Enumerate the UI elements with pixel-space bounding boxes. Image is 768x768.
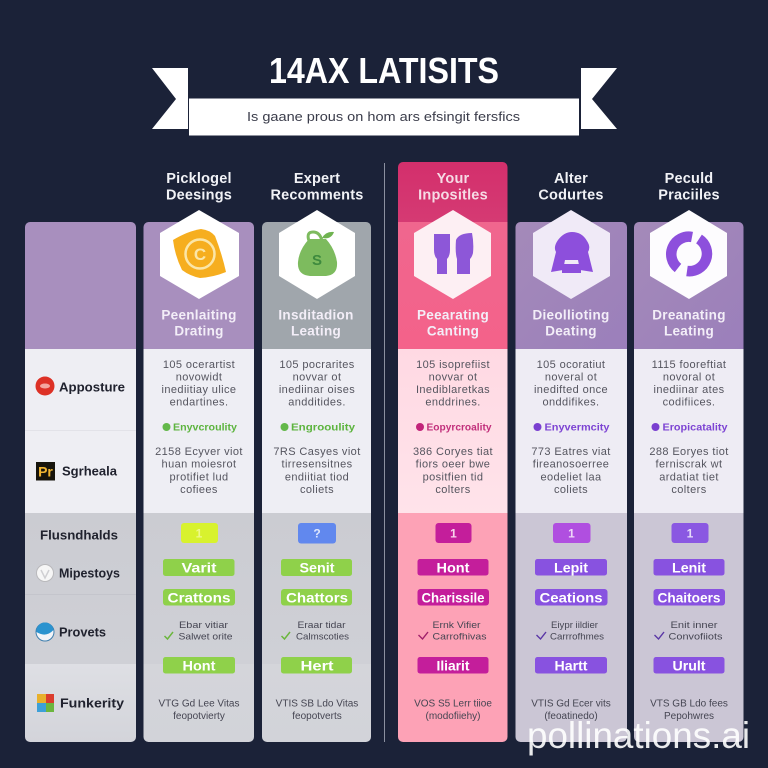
icon: purple hands (434, 233, 473, 274)
badge number: 1 (450, 526, 457, 540)
column subheading: Deating (545, 324, 597, 338)
icon: money bag (298, 232, 337, 276)
pill: Senit (281, 559, 352, 576)
column subheading: Dieollioting (532, 308, 610, 322)
column heading: Deesings (166, 188, 232, 204)
description text: 105 pocrarites (279, 359, 355, 371)
footer text: feopotverts (292, 711, 342, 722)
column heading: Alter (554, 171, 588, 187)
status label: Enyvcroulity (173, 422, 237, 434)
description text: novvar ot (293, 372, 341, 384)
checklist (418, 620, 487, 642)
detail text: coliets (300, 484, 334, 496)
pill: Senit: Senit (300, 560, 335, 576)
badge number (672, 523, 708, 543)
column subheading: Insditadion (278, 308, 354, 322)
column subheading: Leating (291, 324, 341, 338)
pill: Crattons: Crattons (168, 590, 231, 606)
badge number (436, 523, 472, 543)
ribbon left tail (152, 68, 188, 129)
description text: novoral ot (663, 372, 715, 384)
detail text: tirresensitnes (281, 459, 353, 471)
pill: Hert (281, 657, 352, 674)
icon: Pr square: Pr (38, 464, 53, 480)
column heading: Expert (294, 171, 340, 187)
pill: Hont (418, 559, 488, 576)
column heading: Peculd (665, 171, 713, 187)
detail text: coliets (554, 484, 588, 496)
footer text: VTS GB Ldo fees (650, 698, 728, 710)
footer text: VOS S5 Lerr tiioe (414, 698, 492, 710)
footer text: (feoatinedo) (544, 711, 598, 722)
status label: Engrooulity (291, 422, 355, 434)
status label: Enyvermcity (544, 422, 610, 434)
detail text: ferniscrak wt (656, 459, 722, 471)
description text: inediitiay ulice (162, 384, 236, 396)
pill: Varit: Varit (182, 560, 217, 576)
status label: Eropicatality (662, 422, 728, 434)
icon: money bag: S (312, 252, 322, 269)
detail text: huan moiesrot (162, 459, 236, 471)
pill: Chaitoers: Chaitoers (658, 590, 721, 606)
detail text: eodeliet laa (540, 471, 602, 483)
icon: colorful square (37, 694, 54, 712)
pill: Hont (163, 657, 235, 674)
title: 14AX LATISITS (269, 50, 499, 91)
checklist: Convofiiots (668, 632, 723, 642)
pill: Lenit: Lenit (672, 560, 706, 576)
label: Sgrheala: Sgrheala (62, 464, 118, 478)
label: Flusndhalds: Flusndhalds (40, 528, 118, 542)
icon: purple ring (671, 237, 707, 271)
checklist (164, 620, 232, 642)
footer text: Pepohwres (664, 711, 714, 722)
checklist (654, 620, 723, 642)
hexagon badge (533, 210, 610, 299)
column subheading: Dreanating (652, 308, 726, 322)
detail text: ardatiat tiet (659, 471, 719, 483)
footer text: VTIS Gd Ecer vits (531, 698, 611, 710)
description text: inediinar ates (653, 384, 725, 396)
panel: column 3 highlighted (398, 162, 508, 742)
checklist: Calmscoties (296, 632, 349, 642)
badge number (298, 523, 336, 544)
description text: noveral ot (545, 372, 597, 384)
checklist (536, 620, 604, 642)
detail text: colters (671, 484, 707, 496)
ribbon banner (152, 68, 617, 136)
pill: Lepit (535, 559, 607, 576)
icon: red circle (36, 376, 54, 396)
detail text: colters (435, 484, 471, 496)
column subheading: Drating (174, 324, 224, 338)
checklist: Carrofhivas (432, 632, 487, 642)
badge number: 1 (568, 526, 575, 540)
badge number: 1 (196, 526, 203, 540)
status label: Eopyrcroality (426, 422, 492, 434)
detail text: cofiees (180, 484, 218, 496)
column heading: Inpositles (418, 188, 488, 204)
detail text: 386 Coryes tiat (413, 446, 493, 458)
icon: blue circle (36, 622, 54, 641)
column heading: Codurtes (538, 188, 604, 204)
description text: andditides. (288, 396, 346, 408)
label: Mipestoys: Mipestoys (59, 566, 120, 580)
subtitle: Is gaane prous on hom ars efsingit fersfics (247, 109, 521, 124)
label: Funkerity: Funkerity (60, 696, 124, 710)
pill: Hartt (535, 657, 607, 674)
detail text: protifiet lud (169, 471, 229, 483)
description text: novvar ot (429, 372, 477, 384)
center divider (384, 163, 385, 742)
description text: inediinar oises (279, 384, 355, 396)
checklist: Enit inner (670, 620, 718, 631)
pill: Varit (163, 559, 234, 576)
description text: inedifted once (534, 384, 608, 396)
hexagon badge (279, 210, 355, 299)
column subheading: Peearating (417, 308, 489, 322)
checklist: Ebar vitiar (179, 620, 228, 631)
panel: column 2 (262, 171, 371, 742)
description text: 105 isoprefiist (416, 359, 490, 371)
checklist: Carrrofhmes (550, 632, 604, 642)
description text: 105 ocerartist (163, 359, 235, 371)
panel: column 4 (516, 171, 628, 742)
ribbon right tail (581, 68, 617, 129)
detail text: 288 Eoryes tiot (649, 446, 729, 458)
pill: Iliarit (418, 657, 488, 674)
detail text: 2158 Ecyver viot (155, 446, 243, 458)
description text: 105 ocoratiut (537, 359, 605, 371)
panel: column 5 (634, 171, 744, 742)
description text: 1115 fooreftiat (652, 359, 726, 371)
pill: Hont: Hont (182, 658, 216, 674)
label: Provets: Provets (59, 626, 106, 640)
column subheading: Canting (427, 324, 479, 338)
column heading: Your (437, 171, 469, 187)
icon: purple figure (551, 232, 593, 273)
checklist (282, 620, 349, 642)
column subheading: Peenlaiting (161, 308, 237, 322)
column heading: Praciiles (658, 188, 720, 204)
pill: Chattors: Chattors (286, 590, 348, 606)
badge number (553, 523, 590, 543)
pill: Ceations: Ceations (540, 590, 603, 606)
label: Apposture: Apposture (59, 380, 125, 394)
column heading: Picklogel (166, 171, 232, 187)
footer text: VTIS SB Ldo Vitas (276, 698, 358, 710)
icon: white circle (36, 564, 54, 582)
pill: Charissile: Charissile (422, 590, 485, 606)
hexagon badge (414, 210, 491, 299)
panel: column 1 (144, 171, 254, 742)
description text: Inediblaretkas (416, 384, 490, 396)
checklist: Eraar tidar (298, 620, 346, 631)
footer text: feopotvierty (173, 711, 225, 722)
watermark: pollinations.ai (527, 715, 750, 756)
badge number (181, 523, 218, 543)
detail text: endiitiat tiod (285, 471, 349, 483)
detail text: positfien tid (423, 471, 483, 483)
pill: Lepit: Lepit (554, 560, 588, 576)
pill: Iliarit: Iliarit (436, 658, 470, 674)
footer text: VTG Gd Lee Vitas (159, 698, 239, 710)
hexagon badge (650, 210, 727, 299)
description text: codifiices. (663, 396, 715, 408)
detail text: fiors oeer bwe (416, 459, 490, 471)
footer text: (modofiiehy) (425, 711, 481, 722)
description text: novowidt (176, 372, 222, 384)
detail text: fireanosoerree (533, 459, 609, 471)
hexagon badge (160, 210, 239, 299)
description text: onddifikes. (542, 396, 600, 408)
pill: Hont: Hont (436, 560, 470, 576)
column subheading: Leating (664, 324, 714, 338)
pill: Lenit (654, 559, 724, 576)
pill: Hartt: Hartt (554, 658, 588, 674)
pill: Urult (654, 657, 724, 674)
icon: orange leaf seal: C (194, 245, 206, 264)
detail text: 7RS Casyes viot (273, 446, 361, 458)
pill: Hert: Hert (300, 658, 334, 674)
badge number: 1 (687, 526, 694, 540)
pill: Urult: Urult (672, 658, 706, 674)
description text: enddrines. (425, 396, 481, 408)
icon: orange leaf seal (173, 229, 226, 278)
checklist: Ernk Vifier (432, 620, 480, 631)
checklist: Salwet orite (178, 632, 232, 642)
badge number: ? (313, 526, 321, 540)
description text: endartines. (170, 396, 228, 408)
icon: Pr square (36, 462, 55, 480)
column heading: Recomments (270, 188, 364, 204)
panel: row labels (25, 222, 136, 742)
detail text: 773 Eatres viat (531, 446, 611, 458)
ribbon bar (189, 98, 579, 136)
checklist: Eiypr iildier (551, 620, 598, 631)
